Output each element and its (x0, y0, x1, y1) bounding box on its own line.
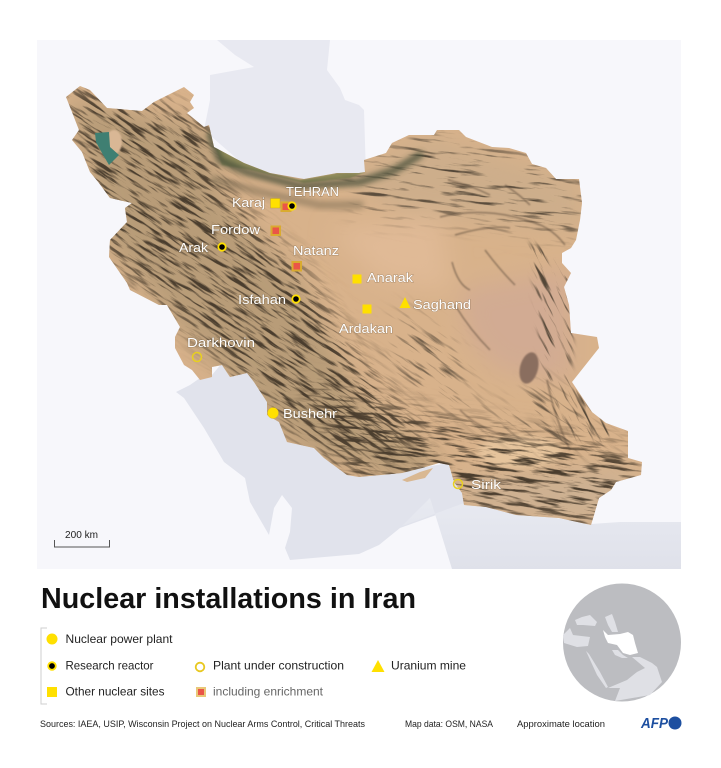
legend: Other nuclear sites (66, 684, 164, 698)
map labels: Anarak (367, 270, 414, 285)
ridge textures (66, 87, 440, 477)
volcanic field (518, 352, 540, 384)
legend: Research reactor (66, 658, 154, 672)
Alborz mountains (210, 135, 420, 205)
Persian Gulf (176, 363, 464, 560)
sources: Sources: IAEA, USIP, Wisconsin Project on Nuclear Arms Control, Critical Threats (40, 719, 365, 730)
legend: Plant under construction (213, 658, 344, 672)
map labels: Natanz (293, 243, 339, 258)
Jazmurian basin (478, 436, 562, 468)
Scale bar: 200 km (65, 529, 98, 541)
locator globe (563, 584, 681, 702)
legend (41, 628, 466, 704)
legend: Uranium mine (391, 658, 466, 672)
Scale bar (54, 529, 110, 547)
Lake Urmia (95, 132, 119, 165)
legend: including enrichment (213, 684, 324, 698)
map labels: Bushehr (283, 406, 338, 421)
map labels: Saghand (413, 297, 471, 312)
location note: Approximate location (517, 719, 605, 730)
AFP logo (640, 716, 682, 732)
map labels: Fordow (211, 222, 261, 237)
map labels (179, 184, 502, 492)
map markers (192, 198, 462, 488)
shaded relief tones (66, 97, 640, 525)
Lake Urmia surroundings (109, 130, 123, 154)
Iran highlight (603, 630, 638, 655)
Iran terrain (66, 86, 642, 525)
map labels: Sirik (471, 477, 502, 492)
map labels: TEHRAN (286, 184, 339, 199)
Caspian Sea (204, 40, 366, 182)
surrounding land (37, 40, 681, 569)
map labels: Ardakan (339, 321, 393, 336)
map data credit: Map data: OSM, NASA (405, 719, 494, 730)
Gulf of Oman (436, 505, 681, 569)
legend: Nuclear power plant (66, 632, 173, 646)
map labels: Darkhovin (187, 335, 255, 350)
Lut streaks (440, 180, 570, 450)
Qeshm island (402, 468, 433, 482)
map labels: Arak (179, 240, 209, 255)
title: Nuclear installations in Iran (41, 583, 416, 615)
panel: map (54, 40, 681, 569)
Caspian coastal plain (215, 147, 366, 183)
map labels: Isfahan (238, 292, 286, 307)
AFP logo: AFP (640, 716, 668, 732)
map labels: Karaj (232, 195, 265, 210)
